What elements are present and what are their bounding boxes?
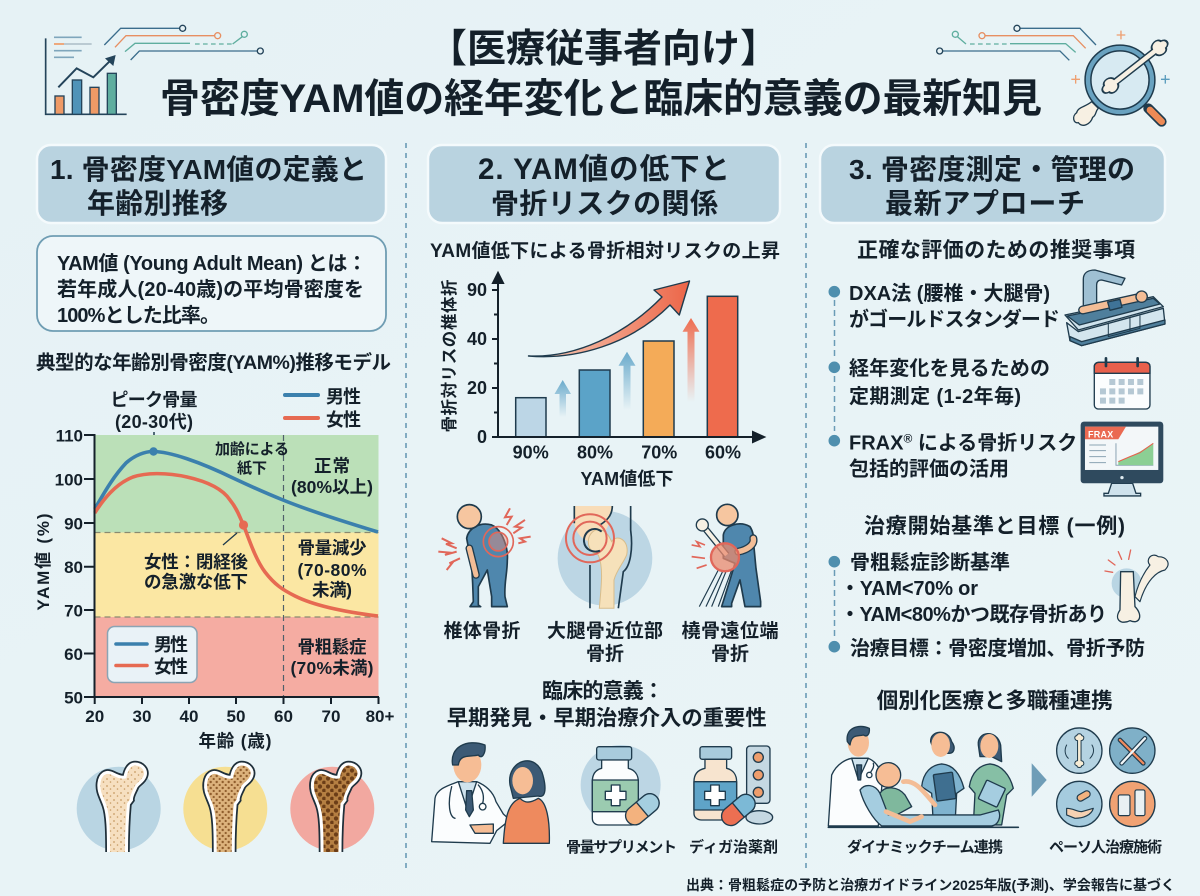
tick labels: 90%: [513, 442, 549, 462]
icon: FRAX monitor: [1081, 422, 1163, 496]
treatment labels: 骨量サプリメント: [566, 839, 677, 856]
icon: osteoporotic bone: [290, 764, 374, 852]
zone labels: (70-80%: [298, 560, 367, 580]
tick labels: 骨折対リスの椎体折: [440, 280, 459, 432]
tick labels: [440, 280, 741, 489]
heading: multidisciplinary: 個別化医療と多職種連携: [877, 689, 1113, 713]
list: recommendations: [828, 282, 1077, 480]
team labels: ダイナミックチーム連携: [847, 838, 1003, 856]
list: treatment criteria: 治療目標：骨密度増加、骨折予防: [850, 637, 1145, 660]
icon: healthy bone: [77, 764, 161, 852]
zone labels: 紙下: [237, 459, 267, 477]
panel: YAM definition: 若年成人(20-40歳)の平均骨密度を: [57, 277, 364, 301]
legend: inset: [108, 626, 197, 682]
zone labels: (70%未満): [290, 658, 374, 678]
zone bands: [94, 435, 378, 697]
x axis labels: 70: [322, 707, 340, 726]
zone labels: 女性：閉経後: [144, 552, 248, 572]
x axis labels: 80+: [366, 707, 394, 726]
axes: [84, 435, 379, 704]
legend: top: 男性: [326, 387, 361, 407]
title: 【医療従事者向け】: [428, 28, 779, 71]
legend: inset: 男性: [154, 635, 188, 655]
tick labels: 80%: [577, 442, 613, 462]
zone labels: [144, 440, 374, 678]
list: recommendations: 経年変化を見るための: [849, 357, 1050, 380]
arrow: to personalised care: [1032, 763, 1047, 797]
x axis labels: 60: [274, 707, 293, 726]
tick labels: 70%: [641, 442, 677, 462]
fracture labels: 骨折: [711, 643, 749, 665]
dividers: [406, 143, 806, 872]
x axis labels: 50: [227, 707, 245, 726]
tick labels: 40: [467, 329, 487, 349]
panel: section 2 header: 2. YAM値の低下と: [478, 153, 730, 186]
treatment labels: ディガ治薬剤: [689, 838, 778, 856]
team labels: [847, 838, 1162, 856]
fracture labels: 橈骨遠位端: [682, 620, 778, 642]
list: treatment criteria: ・YAM<70% or: [840, 578, 978, 600]
small rising arrows: [554, 318, 700, 417]
heading: treatment criteria: 治療開始基準と目標 (一例): [864, 515, 1125, 538]
list: recommendations: ®: [903, 432, 912, 446]
line chart: YAM by age: [34, 426, 394, 751]
illustration: doctor and patient: [432, 743, 549, 843]
fracture labels: 椎体骨折: [444, 620, 520, 642]
icon: osteopenia bone: [183, 764, 267, 852]
zone labels: 正常: [314, 456, 350, 476]
panel: section 1 header: 年齢別推移: [87, 188, 228, 219]
tick labels: 0: [477, 427, 487, 447]
icon: FRAX monitor: FRAX: [1088, 429, 1113, 439]
y axis labels: 60: [64, 645, 83, 664]
treatment labels: [566, 838, 778, 856]
y axis labels: YAM値 (%): [34, 514, 53, 610]
heading: age model chart: 典型的な年齢別骨密度(YAM%)推移モデル: [36, 351, 391, 374]
list: treatment criteria: ・YAM<80%かつ既存骨折あり: [840, 603, 1107, 626]
list: recommendations: 包括的評価の活用: [849, 458, 1009, 480]
tick labels: 90: [467, 280, 487, 300]
icon: broken bone: [1105, 550, 1168, 622]
y axis labels: 50: [64, 688, 83, 708]
icon: bar chart with circuit lines: [46, 25, 263, 114]
illustration: care team: [828, 726, 1018, 827]
list: recommendations: による骨折リスク: [912, 432, 1077, 454]
bars: [516, 296, 738, 437]
panel: section 3 header: 最新アプローチ: [885, 188, 1085, 219]
panel: section 1 header: 1. 骨密度YAM値の定義と: [50, 154, 367, 185]
list: recommendations: 定期測定 (1-2年毎): [849, 385, 1021, 408]
legend: top: 女性: [326, 410, 361, 430]
curve: male: [95, 452, 378, 532]
y axis labels: 110: [56, 426, 83, 446]
title: 骨密度YAM値の経年変化と臨床的意義の最新知見: [160, 77, 1042, 121]
x axis labels: 20: [85, 707, 104, 726]
source note: 出典：骨粗鬆症の予防と治療ガイドライン2025年版(予測)、学会報告に基づく: [686, 877, 1175, 893]
icon: distal radius fracture patient: [692, 504, 761, 607]
panel: section 1 header: [37, 145, 386, 223]
panel: YAM definition: 100%とした比率。: [57, 304, 220, 327]
zone labels: 未満): [312, 580, 352, 600]
panel: YAM definition: YAM値 (Young Adult Mean) とは：: [57, 252, 367, 275]
panel: section 3 header: [820, 145, 1165, 223]
axes: [492, 273, 764, 442]
panel: section 3 header: 3. 骨密度測定・管理の: [849, 154, 1135, 185]
heading: clinical significance: 早期発見・早期治療介入の重要性: [447, 706, 767, 730]
panel: YAM definition: [37, 236, 386, 331]
tick labels: 60%: [705, 442, 741, 462]
icon: medicine bottle with tablets: [694, 746, 773, 829]
list: recommendations: FRAX: [849, 432, 903, 454]
icon: proximal femur fracture: [558, 506, 652, 608]
icon: supplement bottle: [581, 745, 663, 829]
y axis labels: 70: [64, 602, 83, 620]
fracture labels: [444, 620, 778, 665]
team labels: ペーソ人治療施術: [1049, 838, 1162, 856]
heading: recommendations: 正確な評価のための推奨事項: [857, 238, 1135, 262]
panel: section 2 header: 骨折リスクの関係: [491, 188, 718, 219]
zone labels: の急激な低下: [144, 572, 248, 592]
legend: top: [285, 387, 361, 430]
icons: personalised care circles: [1057, 728, 1155, 827]
icon: vertebral fracture patient: [438, 505, 531, 607]
icon: magnifier and bone: [937, 25, 1171, 125]
tick labels: 20: [467, 378, 487, 398]
curve: female: [95, 474, 378, 616]
markers: [149, 447, 248, 545]
fracture labels: 骨折: [586, 643, 624, 665]
title: [160, 28, 1042, 121]
x axis labels: [85, 707, 394, 751]
zone labels: 骨粗鬆症: [298, 637, 366, 657]
fracture labels: 大腿骨近位部: [547, 620, 663, 642]
y axis labels: [34, 426, 83, 708]
heading: relative risk: YAM値低下による骨折相対リスクの上昇: [430, 240, 780, 262]
heading: clinical significance: 臨床的意義：: [542, 680, 664, 703]
icon: calendar: [1094, 358, 1150, 409]
x axis labels: 40: [180, 707, 198, 726]
zone labels: (80%以上): [291, 477, 373, 497]
list: recommendations: がゴールドスタンダード: [849, 307, 1060, 331]
y axis labels: 80: [64, 558, 83, 577]
bar chart: fracture risk: [440, 273, 764, 489]
zone labels: 骨量減少: [298, 538, 367, 558]
list: recommendations: DXA法 (腰椎・大腿骨): [849, 282, 1050, 305]
list: treatment criteria: [828, 551, 1145, 660]
list: treatment criteria: 骨粗鬆症診断基準: [850, 551, 1010, 574]
tick labels: YAM値低下: [580, 469, 674, 489]
x axis labels: 年齢 (歳): [198, 731, 272, 751]
icon: DXA scanner: [1065, 270, 1165, 346]
callout: peak bone mass: [110, 390, 198, 446]
x axis labels: 30: [133, 707, 151, 726]
y axis labels: 100: [55, 470, 83, 490]
legend: inset: 女性: [154, 657, 188, 677]
callout: peak bone mass: ピーク骨量: [110, 390, 198, 410]
callout: peak bone mass: (20-30代): [115, 412, 193, 432]
arrow: overall rise: [528, 281, 690, 357]
zone labels: 加齢による: [215, 440, 289, 458]
panel: section 2 header: [428, 145, 780, 223]
heading: clinical significance: [447, 680, 767, 730]
y axis labels: 90: [64, 514, 83, 534]
